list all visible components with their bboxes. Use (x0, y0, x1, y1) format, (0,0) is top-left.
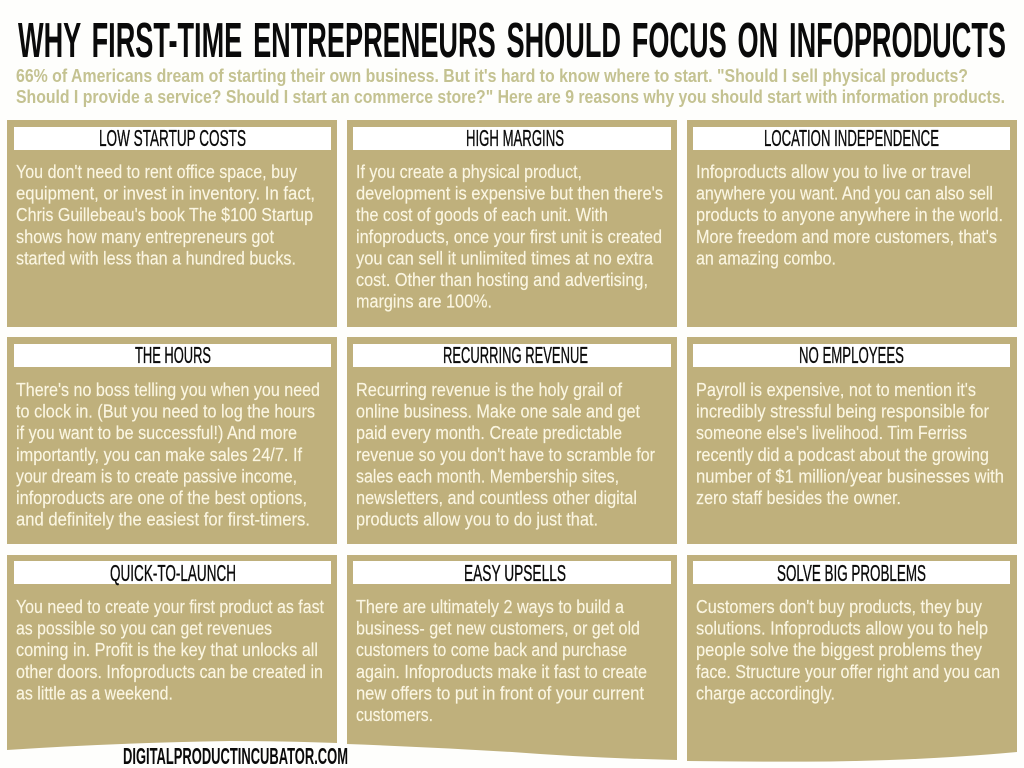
text block: low startup costs (16, 161, 315, 268)
text block: recurring revenue: paid every month. Create predictable (356, 422, 622, 443)
text block: high margins: the cost of goods of each unit. With (356, 204, 608, 225)
text block: low startup costs: started with less than a hundred bucks. (16, 248, 296, 268)
text block: no employees: Payroll is expensive, not to mention it's (696, 379, 976, 400)
heading: easy upsells: EASY UPSELLS (464, 560, 566, 586)
text block: no employees: someone else's livelihood. Tim Ferriss (696, 422, 967, 443)
text block: location independence: an amazing combo. (696, 248, 836, 268)
text block: high margins: cost. Other than hosting and advertising, (356, 269, 648, 290)
text block: recurring revenue: sales each month. Membership sites, (356, 466, 619, 486)
text block: recurring revenue: products allow you to do just that. (356, 508, 598, 530)
text block: quick-to-launch: other doors. Infoproducts can be created in (16, 661, 323, 682)
text block: no employees: recently did a podcast about the growing (696, 444, 989, 465)
panel: no employees (687, 337, 1017, 544)
text block: easy upsells: customers. (356, 704, 433, 725)
text block: solve big problems (696, 596, 1000, 704)
text block: high margins: If you create a physical product, (356, 161, 582, 182)
text block: low startup costs: You don't need to rent office space, buy (16, 161, 298, 182)
text block: the hours: importantly, you can make sales 24/7. If (16, 444, 303, 465)
text block: recurring revenue (356, 379, 655, 530)
text block: low startup costs: Chris Guillebeau's book The $100 Startup (16, 204, 313, 225)
heading: low startup costs: LOW STARTUP COSTS (99, 125, 246, 151)
text block: recurring revenue: newsletters, and countless other digital (356, 487, 637, 508)
text block: location independence (696, 161, 1003, 268)
text block: high margins: you can sell it unlimited times at no extra (356, 248, 654, 268)
text block: no employees: incredibly stressful being responsible for (696, 400, 989, 422)
text block: quick-to-launch: as little as a weekend. (16, 682, 173, 704)
text block: quick-to-launch: You need to create your first product as fast (16, 596, 324, 617)
heading: high margins: HIGH MARGINS (466, 125, 564, 151)
panel: solve big problems (687, 555, 1017, 762)
text block: no employees (696, 379, 1004, 508)
text block: the hours: to clock in. (But you need to log the hours (16, 400, 315, 422)
text block: quick-to-launch (16, 596, 324, 704)
text block: recurring revenue: online business. Make one sale and get (356, 400, 640, 422)
text block: the hours: There's no boss telling you when you need (16, 379, 320, 400)
panel: easy upsells (347, 555, 677, 760)
text block: no employees: zero staff besides the owner. (696, 487, 901, 508)
text block: low startup costs: shows how many entrepreneurs got (16, 226, 274, 247)
text block: easy upsells: customers to come back and purchase (356, 639, 627, 660)
text block: recurring revenue: Recurring revenue is the holy grail of (356, 379, 623, 400)
heading: the hours: THE HOURS (135, 342, 211, 368)
text block: easy upsells (356, 596, 647, 725)
panel: quick-to-launch (7, 555, 337, 750)
panel: location independence (687, 120, 1017, 327)
text block: easy upsells: business- get new customers, or get old (356, 618, 640, 638)
subtitle (16, 66, 1005, 107)
text block: low startup costs: equipment, or invest in inventory. In fact, (16, 183, 315, 204)
panel: recurring revenue (347, 337, 677, 544)
text block: the hours: and definitely the easiest for first-timers. (16, 508, 310, 530)
text block: the hours (16, 379, 320, 530)
text block: solve big problems: Customers don't buy products, they buy (696, 596, 983, 617)
panel: low startup costs (7, 120, 337, 327)
text block: solve big problems: charge accordingly. (696, 682, 835, 704)
heading: no employees: NO EMPLOYEES (799, 342, 904, 368)
heading: recurring revenue: RECURRING REVENUE (443, 342, 588, 368)
text block: easy upsells: again. Infoproducts make it fast to create (356, 661, 647, 682)
text block: the hours: if you want to be successful!) And more (16, 422, 297, 443)
text block: the hours: infoproducts are one of the best options, (16, 487, 307, 508)
text block: high margins: margins are 100%. (356, 290, 492, 312)
text block: recurring revenue: revenue so you don't have to scramble for (356, 444, 655, 465)
text block: easy upsells: new offers to put in front of your current (356, 682, 644, 704)
text block: location independence: Infoproducts allow you to live or travel (696, 161, 971, 182)
text block: easy upsells: There are ultimately 2 ways to build a (356, 596, 625, 617)
heading: quick-to-launch: QUICK-TO-LAUNCH (110, 560, 236, 586)
text block: high margins (356, 161, 663, 312)
text block: quick-to-launch: as possible so you can get revenues (16, 618, 272, 638)
text block: solve big problems: people solve the biggest problems they (696, 639, 983, 660)
text block: quick-to-launch: coming in. Profit is the key that unlocks all (16, 639, 318, 660)
text block: high margins: development is expensive but then there's (356, 183, 663, 204)
panel: high margins (347, 120, 677, 327)
text block: high margins: infoproducts, once your first unit is created (356, 226, 662, 247)
text block: solve big problems: solutions. Infoproducts allow you to help (696, 618, 988, 638)
text block: the hours: your dream is to create passive income, (16, 466, 297, 486)
panel: the hours (7, 337, 337, 544)
